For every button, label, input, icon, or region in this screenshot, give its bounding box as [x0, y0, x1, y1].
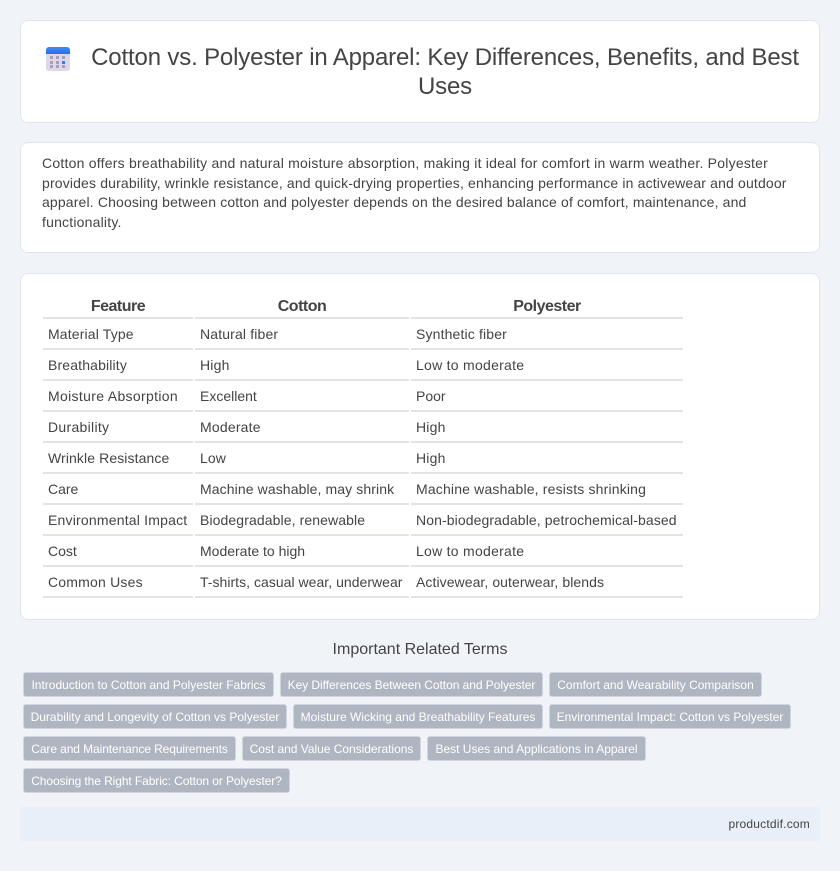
footer bar — [20, 807, 820, 841]
related terms tags: Comfort and Wearability Comparison — [557, 678, 754, 692]
table: Durability — [48, 419, 109, 435]
related terms tags: Introduction to Cotton and Polyester Fabrics — [31, 678, 266, 692]
title: Uses — [418, 73, 472, 100]
table: Machine washable, resists shrinking — [416, 481, 646, 497]
title — [91, 44, 799, 100]
related terms tags: Environmental Impact: Cotton vs Polyester — [557, 710, 783, 724]
comparison table panel — [20, 273, 820, 620]
table: Moderate — [200, 419, 261, 435]
intro panel — [20, 142, 820, 253]
header: cotton: Cotton — [278, 298, 326, 315]
table: Low — [200, 450, 226, 466]
table: Common Uses — [48, 574, 143, 590]
header: polyester: Polyester — [513, 298, 581, 315]
table: Cost — [48, 543, 77, 559]
table: Non-biodegradable, petrochemical-based — [416, 512, 677, 528]
intro text — [42, 155, 787, 230]
table: Care — [48, 481, 78, 497]
related terms heading: Important Related Terms — [333, 641, 507, 658]
table: High — [416, 419, 446, 435]
intro text: Cotton offers breathability and natural moisture absorption, making it ideal for comfort in warm weather. Polyester — [42, 155, 768, 171]
related terms tags: Cost and Value Considerations — [250, 742, 413, 756]
table: Biodegradable, renewable — [200, 512, 365, 528]
table: Machine washable, may shrink — [200, 481, 394, 497]
footer source: productdif.com — [728, 817, 810, 831]
intro text: functionality. — [42, 214, 122, 230]
related terms tags: Moisture Wicking and Breathability Features — [301, 710, 535, 724]
related terms tags: Best Uses and Applications in Apparel — [435, 742, 638, 756]
table: Breathability — [48, 357, 127, 373]
title: Cotton vs. Polyester in Apparel: Key Differences, Benefits, and Best — [91, 44, 799, 71]
header panel — [20, 20, 820, 123]
table: High — [416, 450, 446, 466]
table: Wrinkle Resistance — [48, 450, 169, 466]
table — [43, 298, 683, 598]
icon: calendar — [46, 47, 70, 71]
table: Excellent — [200, 388, 257, 404]
table: High — [200, 357, 230, 373]
intro text: apparel. Choosing between cotton and polyester depends on the desired balance of comfort, maintenance, and — [42, 194, 746, 210]
table: Activewear, outerwear, blends — [416, 574, 604, 590]
related terms tags: Durability and Longevity of Cotton vs Polyester — [31, 710, 279, 724]
related terms tags: Choosing the Right Fabric: Cotton or Polyester? — [31, 774, 282, 788]
table: Environmental Impact — [48, 512, 187, 528]
table: Moderate to high — [200, 543, 305, 559]
table: Moisture Absorption — [48, 388, 178, 404]
table: Low to moderate — [416, 543, 524, 559]
table: Material Type — [48, 326, 134, 342]
table: Low to moderate — [416, 357, 524, 373]
related terms tags: Care and Maintenance Requirements — [31, 742, 228, 756]
table: T-shirts, casual wear, underwear — [200, 574, 402, 590]
table: Natural fiber — [200, 326, 278, 342]
table: Poor — [416, 388, 446, 404]
related terms tags — [23, 672, 791, 793]
header: feature: Feature — [91, 298, 145, 315]
table: Synthetic fiber — [416, 326, 507, 342]
intro text: provides durability, wrinkle resistance, and quick-drying properties, enhancing performance in activewear and outdoor — [42, 174, 787, 190]
related terms tags: Key Differences Between Cotton and Polyester — [288, 678, 535, 692]
